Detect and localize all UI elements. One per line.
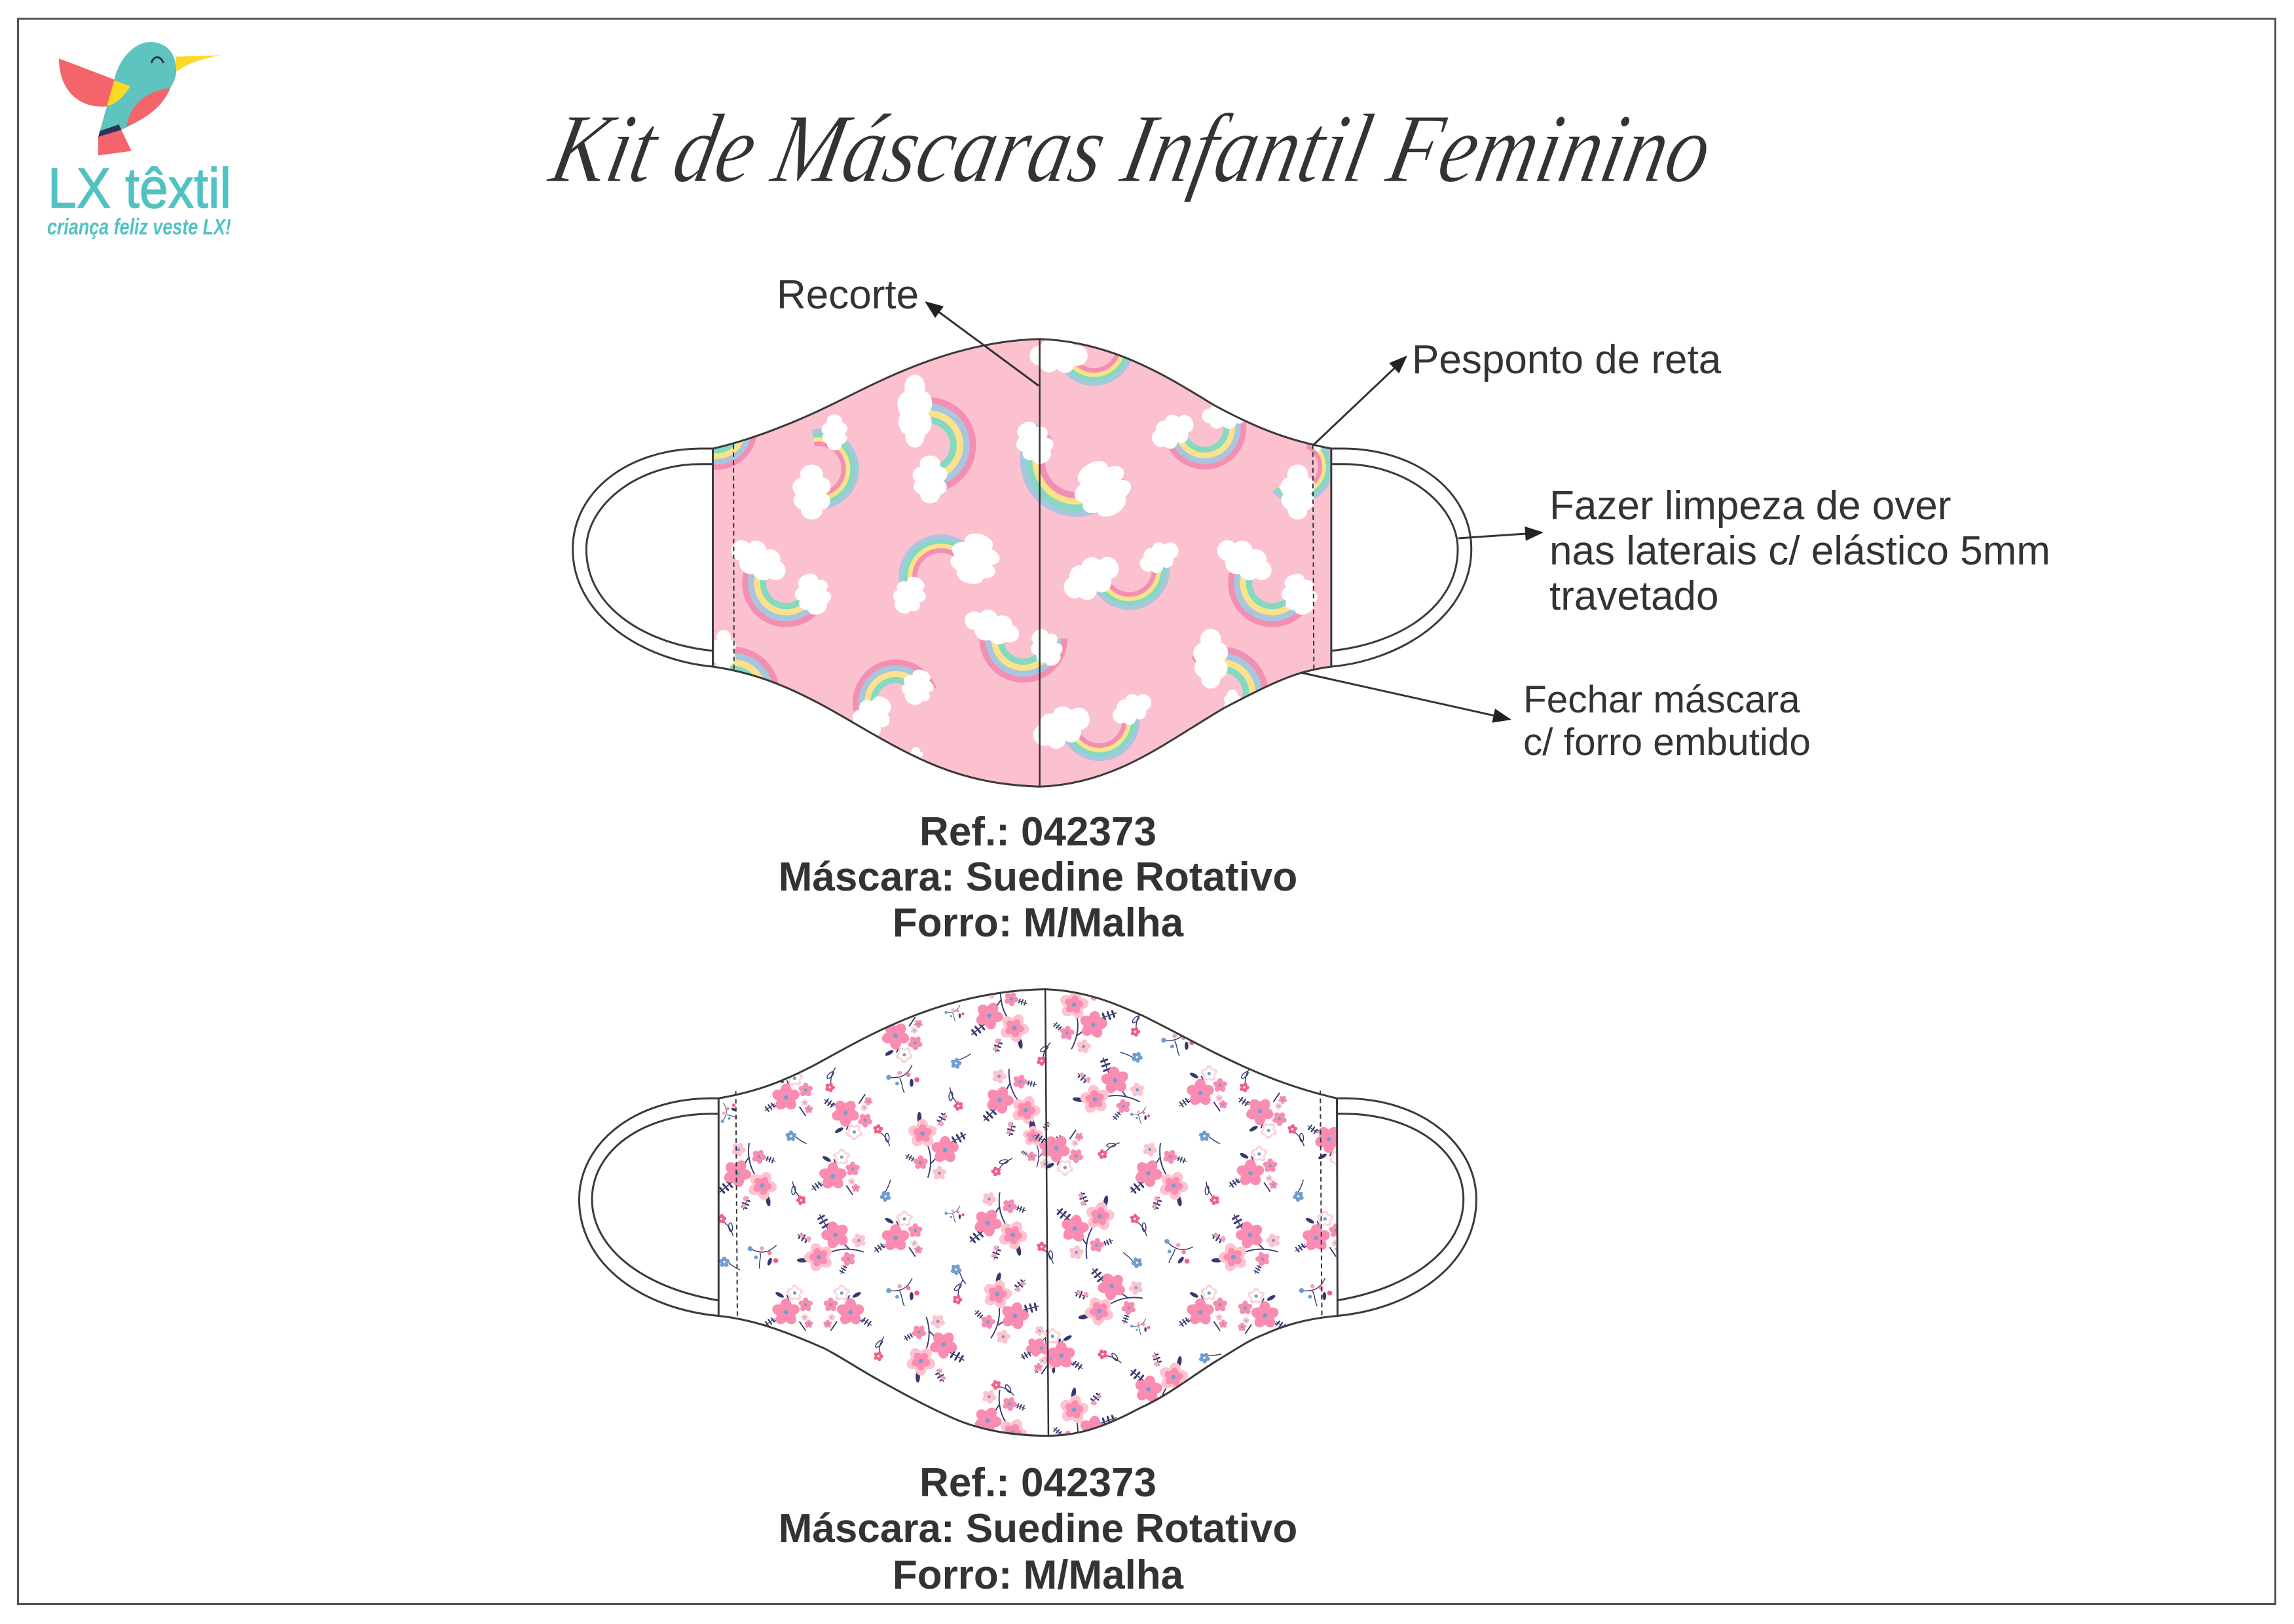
mask 2: floral print bbox=[579, 978, 1476, 1464]
arrow to Pesponto bbox=[1312, 350, 1413, 446]
side stitching: pesponto right bbox=[1313, 445, 1314, 671]
elastic ear loop left bbox=[573, 449, 713, 667]
callout: Recorte bbox=[777, 272, 1039, 386]
label Fechar máscara: c/ forro embutido bbox=[1523, 721, 1811, 764]
title: Kit de Máscaras Infantil Feminino bbox=[541, 94, 1721, 203]
logo: LX têxtil bbox=[47, 42, 231, 240]
mask outline bbox=[713, 339, 1331, 786]
reference text 1: Forro: M/Malha bbox=[893, 900, 1184, 946]
label Recorte: Recorte bbox=[777, 272, 919, 318]
label Fechar máscara: Fechar máscara bbox=[1523, 678, 1800, 721]
arrow to Fazer limpeza bbox=[1458, 525, 1544, 541]
arrow to Recorte bbox=[920, 295, 1039, 386]
label Fazer limpeza: Fazer limpeza de over bbox=[1549, 483, 1951, 528]
arrow to Fechar máscara bbox=[1301, 673, 1513, 727]
mask outline bbox=[718, 989, 1337, 1436]
centre seam: recorte bbox=[1039, 339, 1041, 786]
callout: Fechar máscara bbox=[1301, 673, 1811, 764]
elastic ear loop right bbox=[1337, 1098, 1476, 1316]
reference text 2: Máscara: Suedine Rotativo bbox=[779, 1506, 1297, 1551]
logo tagline: criança feliz veste LX! bbox=[47, 215, 231, 240]
side stitching: pesponto left bbox=[733, 445, 735, 671]
icon: hummingbird bbox=[59, 42, 221, 155]
side stitching right bbox=[1320, 1090, 1322, 1318]
mask 1: rainbow print bbox=[573, 337, 1471, 790]
reference text 1: Ref.: 042373 bbox=[919, 809, 1156, 855]
centre seam bbox=[1045, 989, 1048, 1436]
fabric: pink with rainbows and clouds bbox=[685, 337, 1345, 790]
reference text 2: Ref.: 042373 bbox=[919, 1460, 1156, 1505]
reference text 1: Máscara: Suedine Rotativo bbox=[779, 855, 1297, 900]
callout: Pesponto de reta bbox=[1312, 337, 1722, 446]
fabric: white with floral bouquets bbox=[719, 992, 1337, 1434]
reference text 2: Forro: M/Malha bbox=[893, 1553, 1184, 1598]
logo wordmark: LX têxtil bbox=[48, 157, 231, 220]
callout: Fazer limpeza bbox=[1458, 483, 2050, 619]
elastic ear loop left bbox=[579, 1098, 718, 1316]
label Pesponto de reta: Pesponto de reta bbox=[1412, 337, 1722, 382]
elastic ear loop right bbox=[1331, 449, 1471, 667]
label Fazer limpeza: travetado bbox=[1549, 574, 1719, 619]
side stitching left bbox=[736, 1091, 737, 1320]
label Fazer limpeza: nas laterais c/ elástico 5mm bbox=[1549, 528, 2050, 574]
